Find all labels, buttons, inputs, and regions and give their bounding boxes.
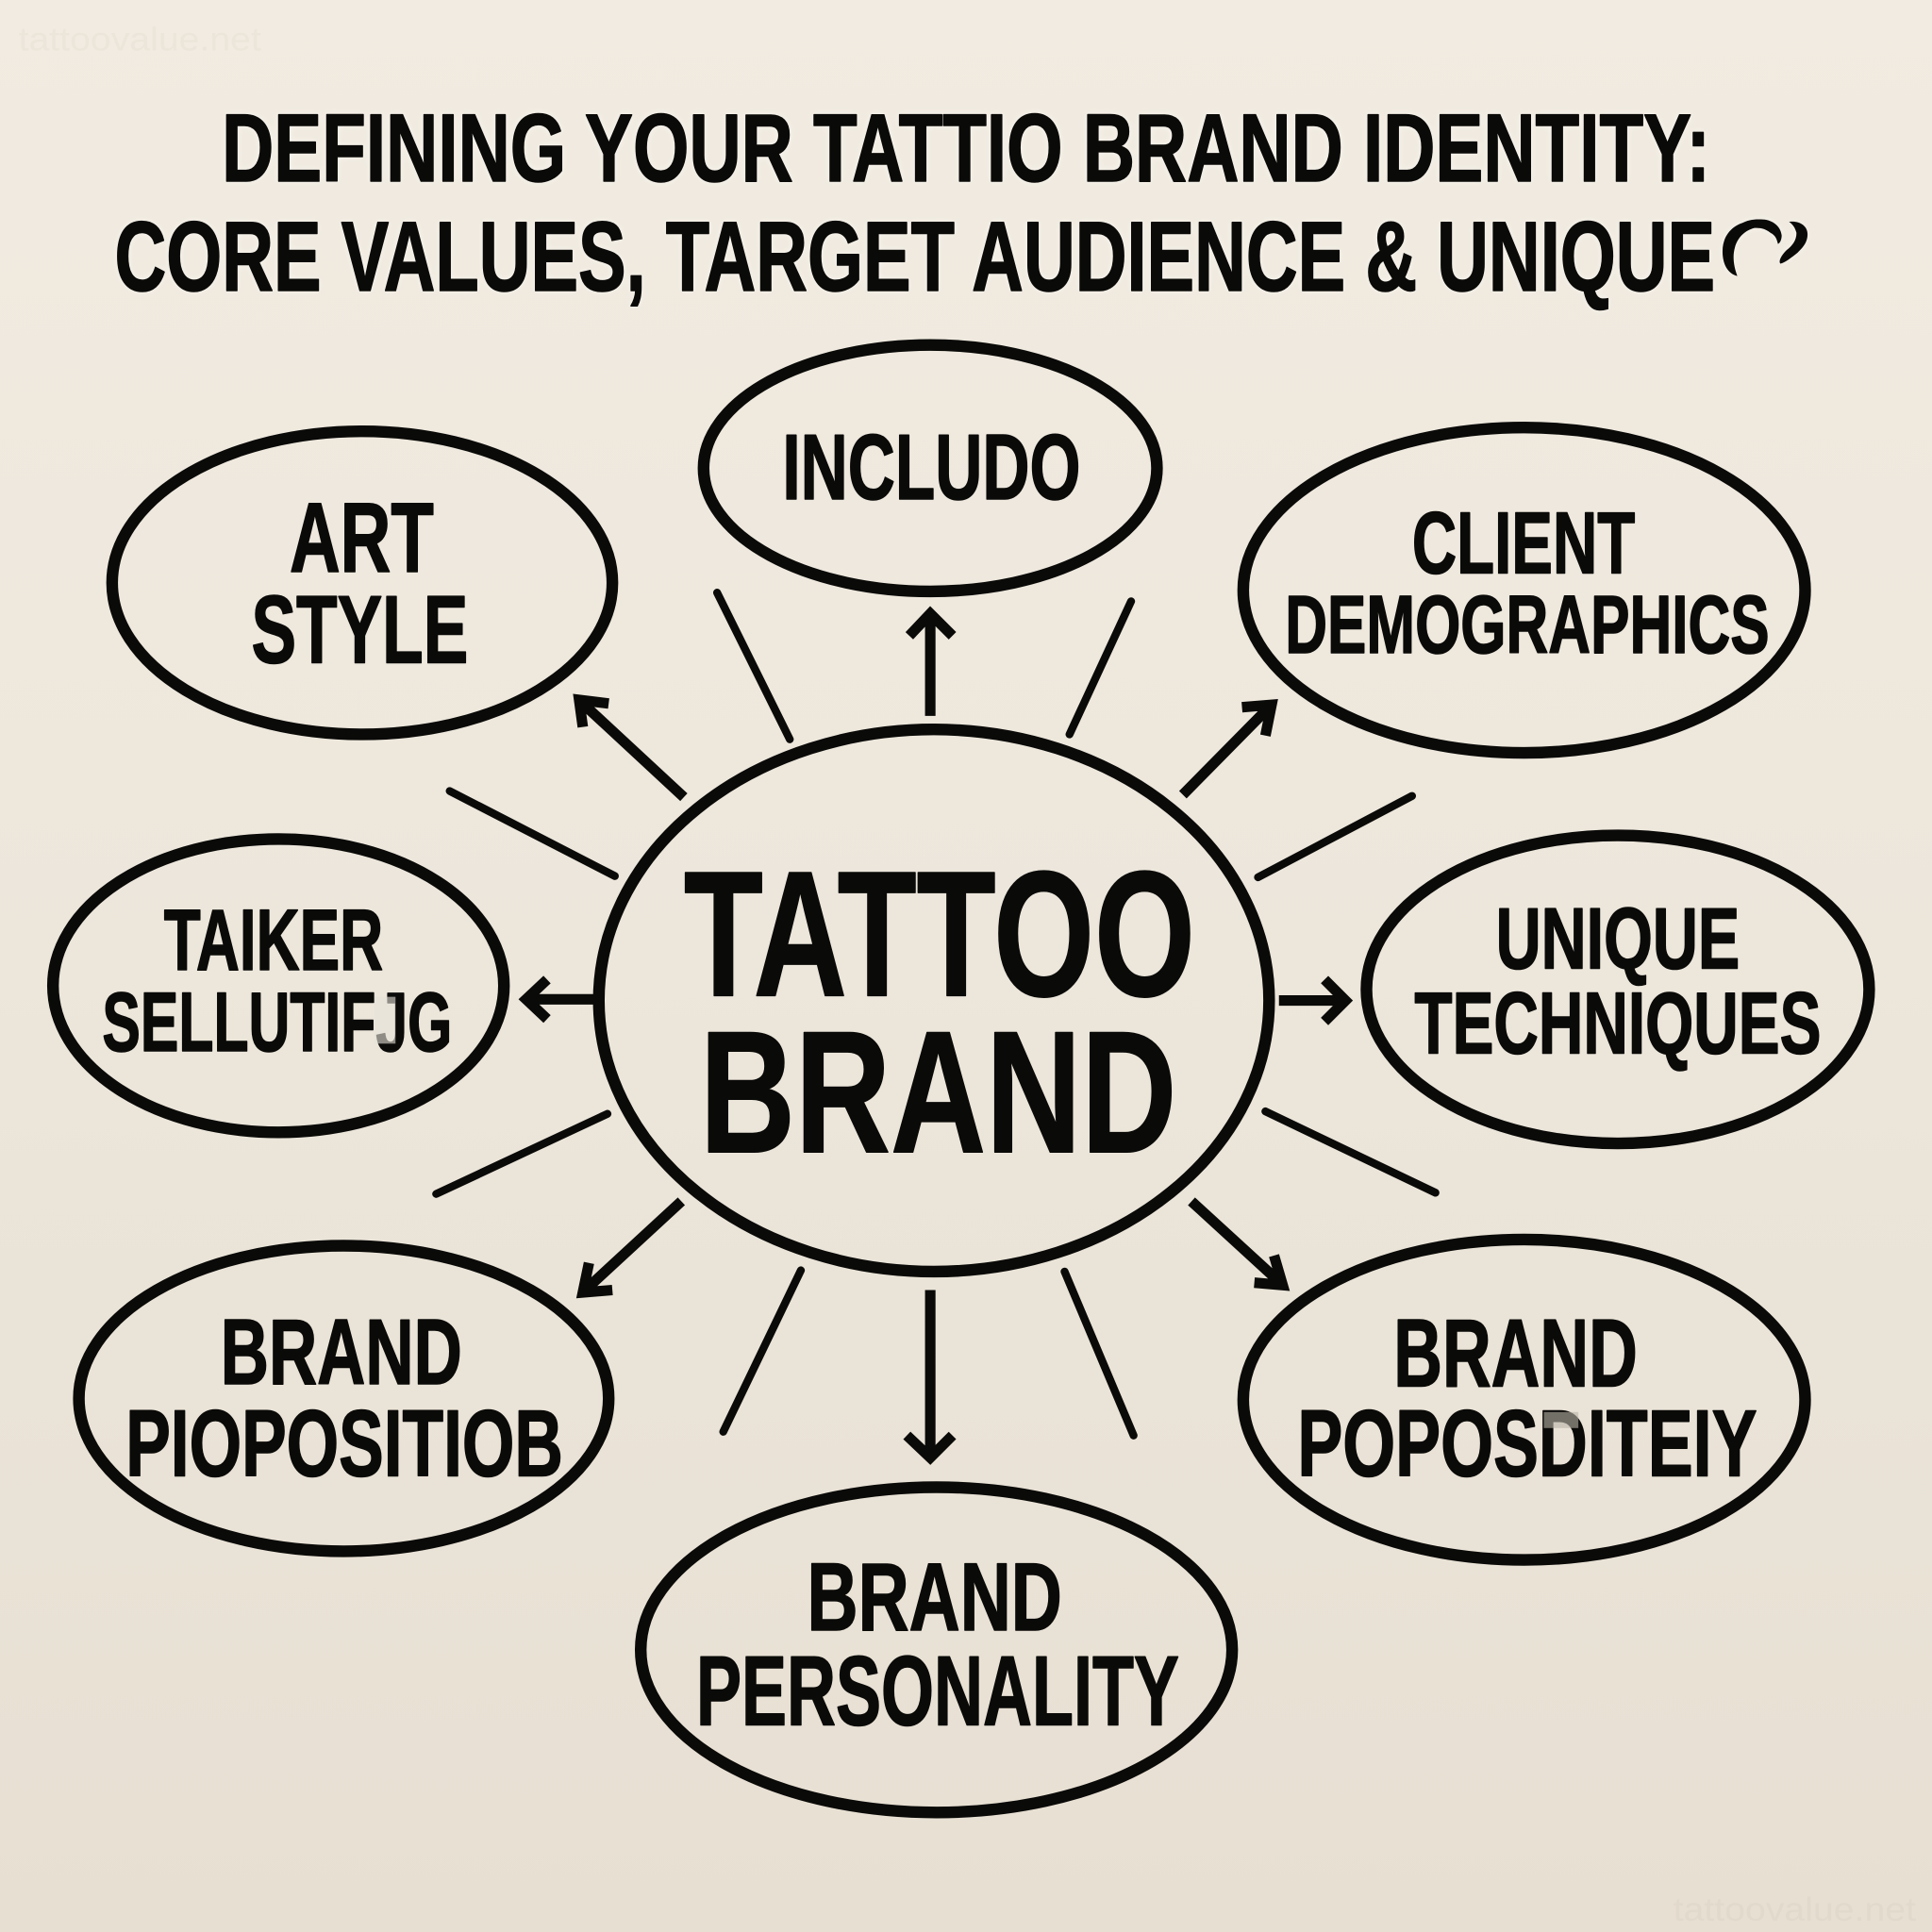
arrow: to Art Style (579, 700, 684, 797)
node: Brand Personality: BRAND (808, 1543, 1062, 1651)
node: Brand Poposditeiy (1243, 1240, 1805, 1560)
central node: Tattoo Brand: TATTOO (684, 835, 1195, 1034)
node: Brand Poposditeiy: BRAND (1393, 1299, 1638, 1407)
node: Brand Personality (641, 1487, 1232, 1812)
node: Taiker Sellutifjg: TAIKER (164, 892, 383, 989)
node: Art Style: STYLE (251, 576, 468, 684)
node: Brand Pioposition: BRAND (221, 1300, 462, 1404)
watermark top left: tattoovalue.net (19, 22, 261, 58)
node: Includo (704, 345, 1157, 591)
title (114, 94, 1807, 312)
central node: Tattoo Brand (599, 729, 1269, 1272)
node: Taiker Sellutifjg (53, 839, 504, 1132)
connector lines (436, 592, 1436, 1436)
node: Unique Techniques (1366, 836, 1869, 1143)
node: Taiker Sellutifjg: SELLUTIFJG (102, 975, 452, 1069)
node: Art Style: ART (290, 483, 434, 593)
node: Client Demographics (1243, 427, 1805, 753)
node: Client Demographics: CLIENT (1412, 493, 1635, 591)
node: Unique Techniques: UNIQUE (1496, 891, 1740, 988)
watermark bottom right: tattoovalue.net (1674, 1891, 1916, 1928)
central node: Tattoo Brand: BRAND (700, 995, 1176, 1190)
arrow: to Brand Pioposition (583, 1201, 681, 1292)
node: Brand Pioposition (79, 1245, 608, 1551)
node: Art Style (112, 431, 612, 734)
arrow: to Includo (909, 613, 953, 716)
arrow: to Brand Personality (907, 1291, 953, 1457)
arrow: to Taiker Sellutifjg (526, 979, 595, 1019)
arrow: to Brand Poposditeiy (1191, 1201, 1283, 1285)
arrow: to Unique Techniques (1279, 979, 1345, 1022)
arrow: to Client Demographics (1183, 705, 1272, 794)
node: Brand Poposditeiy: POPOSDITEIY (1297, 1391, 1757, 1497)
node: Brand Personality: PERSONALITY (696, 1637, 1179, 1747)
node: Includo: INCLUDO (782, 415, 1080, 519)
node: Brand Pioposition: PIOPOSITIOB (125, 1391, 563, 1497)
